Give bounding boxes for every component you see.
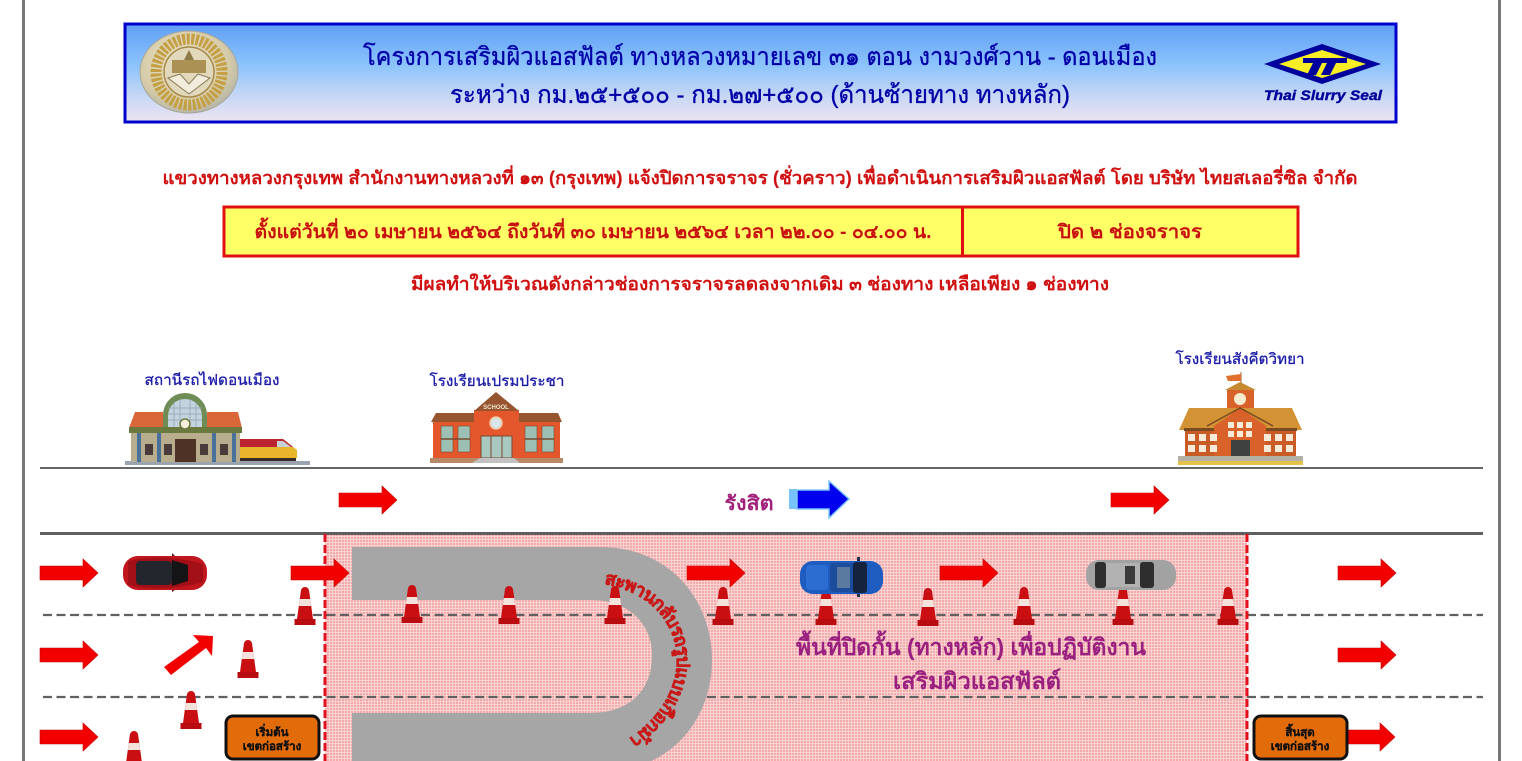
arrow: merge diagonal [164, 635, 213, 675]
cone 3 [498, 586, 520, 624]
label: Prem Pracha school: โรงเรียนเปรมประชา [430, 372, 564, 390]
sign: construction zone end [1254, 716, 1347, 759]
title line 1: โครงการเสริมผิวแอสฟัลต์ ทางหลวงหมายเลข ๓๑ ตอน งามวงศ์วาน - ดอนเมือง [363, 42, 1157, 71]
arrow: lane 2 left [40, 641, 98, 669]
label: Don Mueang station: สถานีรถไฟดอนเมือง [144, 371, 280, 389]
car: blue [800, 557, 883, 597]
caption line 1: พื้นที่ปิดกั้น (ทางหลัก) เพื่อปฏิบัติงาน [796, 630, 1146, 660]
cone 7 [918, 588, 938, 626]
right page border [1498, 0, 1501, 761]
header banner [125, 24, 1396, 122]
main road edge [40, 532, 1483, 535]
arrow: lane 1 exit [1338, 559, 1396, 587]
impact text: มีผลทำให้บริเวณดังกล่าวช่องการจราจรลดลงจากเดิม ๓ ช่องทาง เหลือเพียง ๑ ช่องทาง [411, 273, 1109, 294]
arrow: lane 1 in zone [687, 559, 745, 587]
left page border [22, 0, 25, 761]
school sign: SCHOOL [483, 405, 509, 411]
arrow: lane 1 left [40, 559, 98, 587]
closure dates: ตั้งแต่วันที่ ๒๐ เมษายน ๒๕๖๔ ถึงวันที่ ๓๐ เมษายน ๒๕๖๔ เวลา ๒๒.๐๐ - ๐๔.๐๐ น. [254, 217, 932, 243]
icon: school building [430, 392, 563, 463]
icon: Thai Slurry Seal logo [1264, 44, 1383, 103]
cone 5 [712, 587, 734, 625]
destination label: Rangsit: รังสิต [724, 493, 774, 515]
cone 13 [124, 731, 144, 761]
arrow: lane 1 entering zone [291, 559, 349, 587]
sign: construction zone end: เขตก่อสร้าง [1271, 740, 1330, 753]
announcement text: แขวงทางหลวงกรุงเทพ สำนักงานทางหลวงที่ ๑๓ (กรุงเทพ) แจ้งปิดการจราจร (ชั่วคราว) เพื่อดำเนินการเสริมผิวแอสฟัลต์ โดย บริษัท ไทยสเลอรี่ซิล จำกัด [162, 165, 1358, 190]
cone 10 [1218, 587, 1238, 625]
cone 12 [180, 691, 202, 729]
cone 4 [604, 586, 626, 624]
icon: school with clock tower [1178, 372, 1303, 465]
sign: construction zone end: สิ้นสุด [1285, 723, 1315, 740]
arrow: lane 3 left [40, 723, 98, 751]
sign: construction zone start: เริ่มต้น [255, 723, 289, 739]
icon: railway station [125, 393, 310, 465]
closure schedule box [224, 207, 1298, 256]
work zone start boundary [324, 534, 326, 761]
car: red [123, 553, 207, 592]
sign: construction zone start: เขตก่อสร้าง [243, 740, 302, 753]
caption line 2: เสริมผิวแอสฟัลต์ [893, 668, 1061, 694]
arrow: lane 2 exit [1338, 641, 1396, 669]
cone 8 [1014, 587, 1034, 625]
cone 1 [294, 587, 316, 625]
title line 2: ระหว่าง กม.๒๕+๕๐๐ - กม.๒๗+๕๐๐ (ด้านซ้ายทาง ทางหลัก) [450, 81, 1070, 109]
work zone end boundary [1246, 534, 1248, 761]
cone 6 [816, 587, 836, 625]
lane divider 2 [43, 696, 1483, 698]
arrow: blue direction to Rangsit [789, 481, 849, 518]
cone 2 [402, 585, 422, 623]
arrow: lane 3 exit [1337, 723, 1395, 751]
icon: highway department seal [140, 31, 238, 113]
lanes closed: ปิด ๒ ช่องจราจร [1057, 222, 1203, 243]
work zone caption [796, 630, 1146, 694]
cone 9 [1112, 587, 1134, 625]
car: grey [1086, 560, 1176, 590]
arrow: access road right [1111, 486, 1169, 514]
closed work zone [325, 534, 1247, 761]
label: Sangkeet Wittaya school: โรงเรียนสังคีตวิทยา [1176, 350, 1304, 368]
U-turn bridge [352, 547, 712, 761]
arrow: lane 1 mid zone [940, 559, 998, 587]
sign: construction zone start [226, 716, 319, 759]
upper road edge [40, 467, 1483, 469]
logo wordmark: Thai Slurry Seal [1264, 87, 1383, 103]
bridge label: สะพานกลับรถรูปแบบเกือกม้า [605, 574, 691, 746]
arrow: access road left [339, 486, 397, 514]
cone 11 [238, 640, 258, 678]
lane divider 1 [43, 614, 1483, 616]
